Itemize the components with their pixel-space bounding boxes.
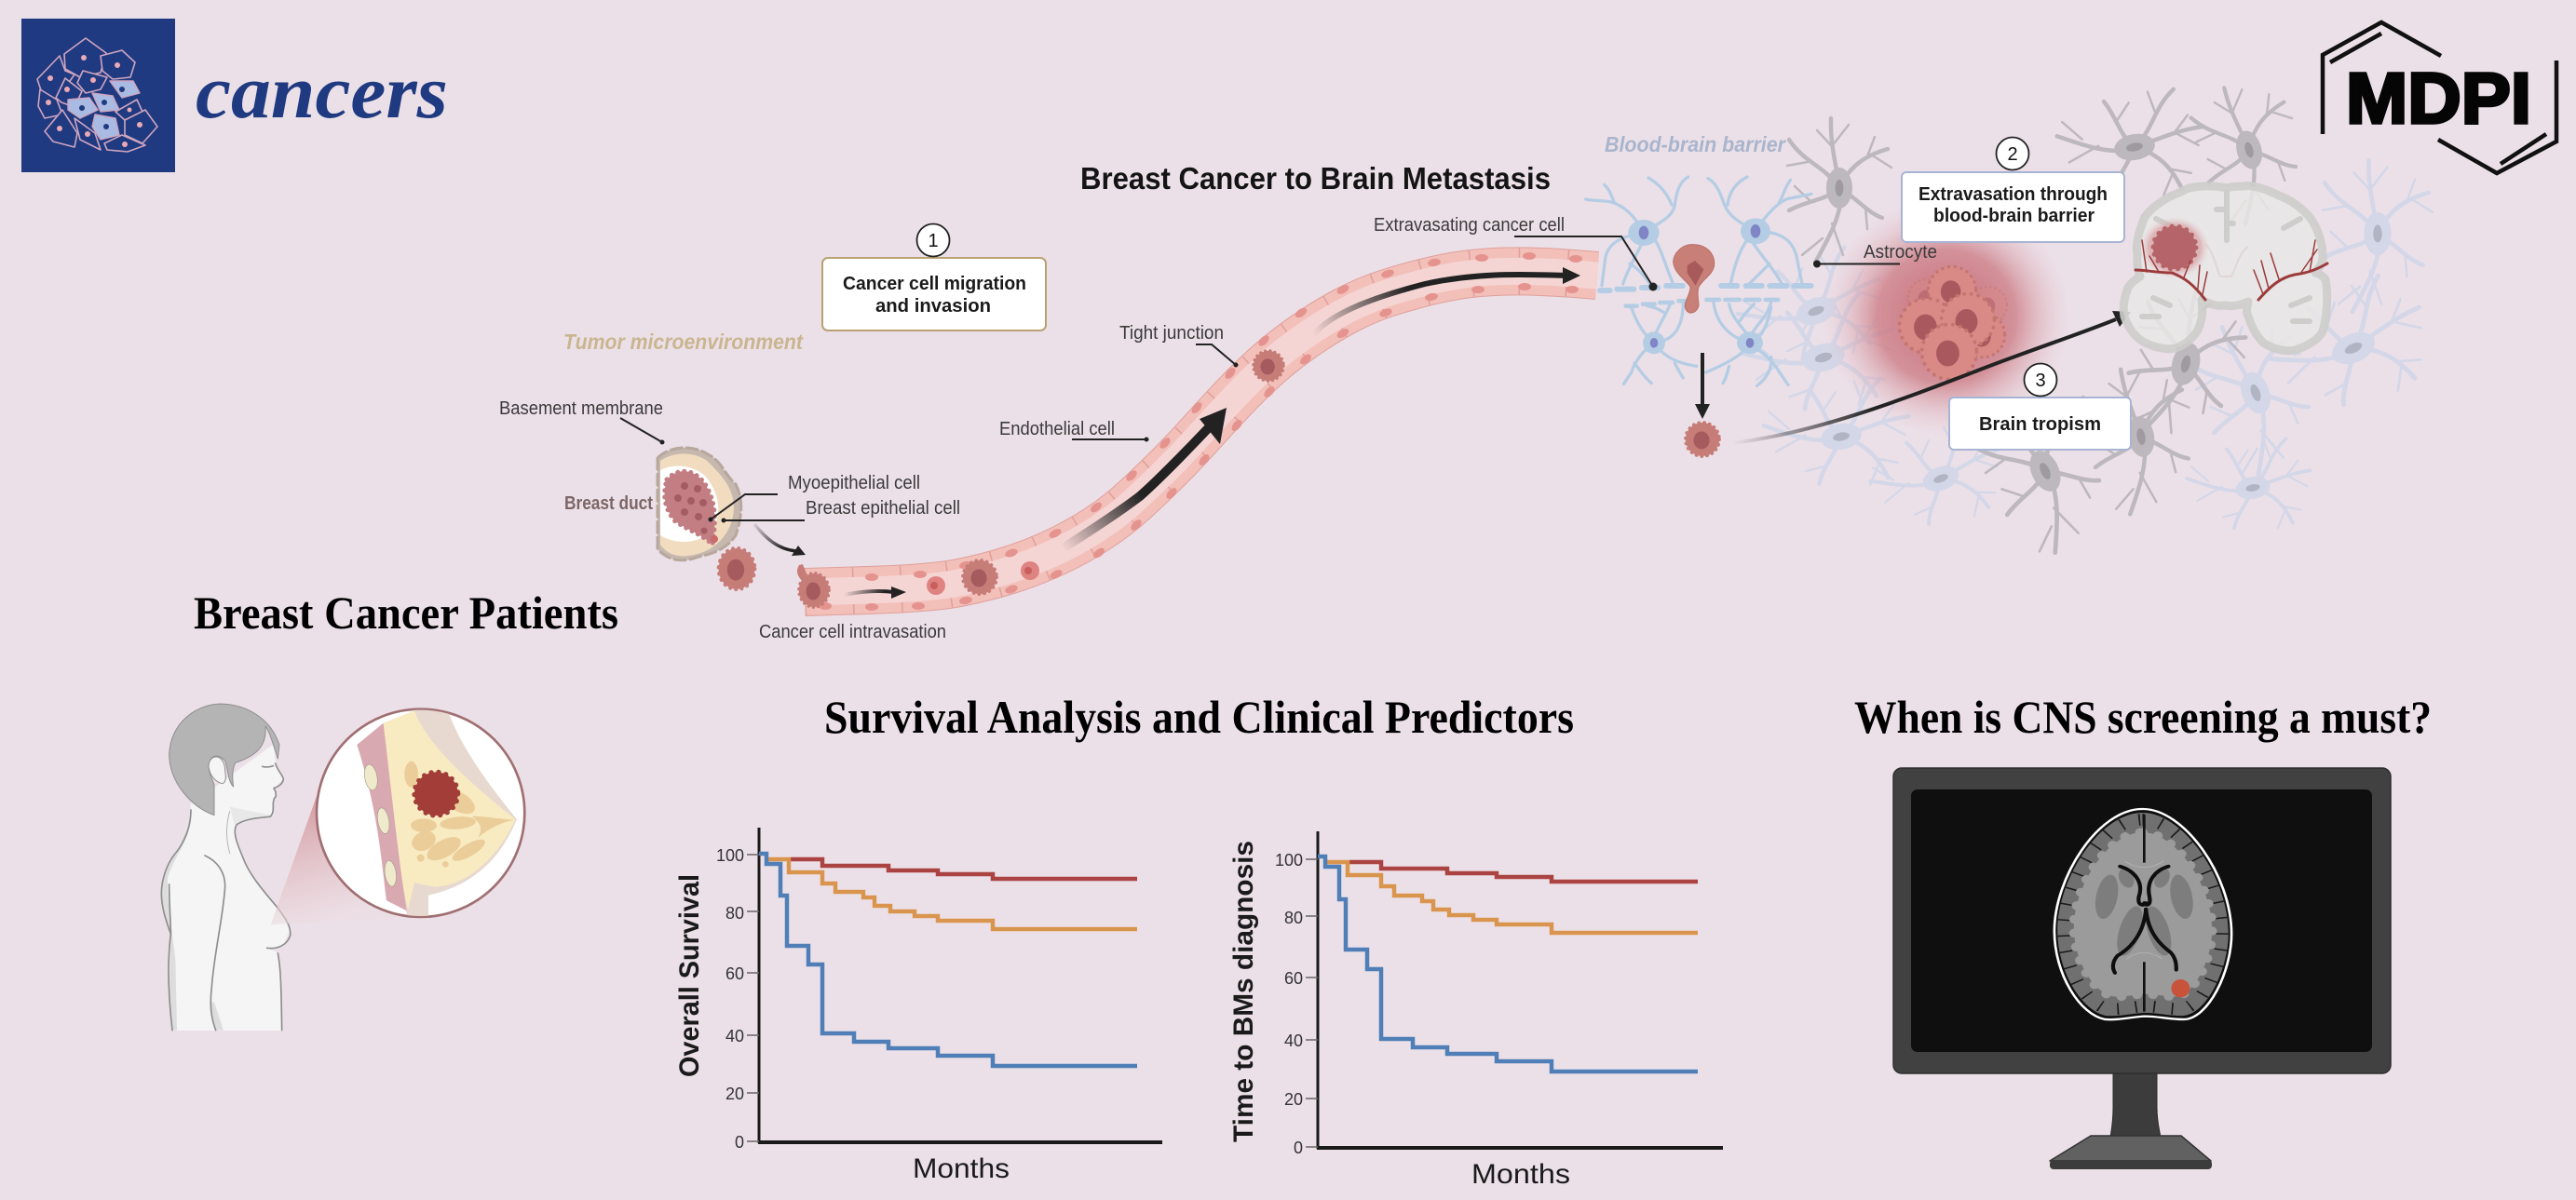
heading: breast cancer patients: Breast Cancer Patients	[194, 587, 618, 639]
zoom wedge	[271, 794, 416, 924]
y axis tick labels	[1275, 851, 1303, 1157]
logo: cancers journal	[21, 19, 448, 172]
step 2 box	[1902, 172, 2124, 242]
line: orange time curve	[1326, 862, 1698, 933]
axes	[747, 828, 1162, 1143]
hair	[169, 704, 279, 816]
icon: cancers cell cluster	[21, 19, 175, 172]
y axis tick labels: 40	[1284, 1031, 1303, 1050]
blood-brain barrier astrocytes	[1586, 177, 1814, 385]
label: breast epithelial cell: Breast epithelial cell	[806, 498, 960, 519]
monitor stand	[2050, 1071, 2212, 1169]
axes	[1306, 831, 1723, 1149]
y axis tick labels: 0	[1294, 1139, 1303, 1157]
arrow: small vessel arrow	[844, 587, 906, 599]
step 2 text: Extravasation through	[1918, 184, 2108, 205]
step 3 box	[1949, 398, 2131, 450]
brain scan lesion	[2171, 979, 2190, 997]
label: myoepithelial cell: Myoepithelial cell	[788, 473, 920, 493]
faded astrocyte background	[1729, 73, 2447, 565]
label: basement membrane: Basement membrane	[499, 398, 663, 419]
label: myoepithelial cell	[708, 473, 920, 521]
y axis tick labels: 40	[725, 1027, 744, 1045]
arrow: toward brain	[1732, 311, 2131, 443]
y axis tick labels	[716, 846, 744, 1152]
arrow: duct to vessel	[754, 524, 806, 556]
line: orange survival curve	[767, 859, 1137, 929]
icon: MDPI hexagon	[2323, 22, 2556, 173]
heading: survival analysis and clinical predictors: Survival Analysis and Clinical Predictors	[824, 691, 1574, 743]
step 1 box	[822, 258, 1046, 330]
tumor microenvironment label: Tumor microenvironment	[563, 330, 804, 354]
line: red time curve	[1349, 862, 1698, 882]
step 2: extravasation through blood-brain barrier	[1902, 138, 2124, 242]
MDPI wordmark: MDPI	[2346, 59, 2531, 139]
axial brain scan	[2054, 809, 2231, 1019]
step 1 number	[916, 223, 950, 257]
label: tight junction	[1119, 323, 1239, 367]
y axis tick labels: 100	[716, 846, 744, 865]
heading: breast cancer to brain metastasis: Breast Cancer to Brain Metastasis	[1080, 161, 1551, 196]
step 1 text	[843, 274, 1026, 317]
logo: MDPI	[2323, 22, 2556, 173]
label: blood-brain barrier: Blood-brain barrier	[1605, 132, 1786, 156]
step 1 number: 1	[928, 231, 939, 251]
step 2 number: 2	[2007, 144, 2018, 165]
coronal brain with tumor	[2123, 186, 2327, 351]
y axis tick labels: 60	[1284, 969, 1303, 988]
step 2 text: blood-brain barrier	[1933, 206, 2095, 226]
label: cancer cell intravasation: Cancer cell intravasation	[759, 622, 946, 642]
label: astrocyte	[1813, 242, 1937, 268]
arrow: extravasated cell downward	[1695, 353, 1710, 419]
y axis title: Time to BMs diagnosis	[1228, 841, 1259, 1142]
x axis title: Months	[1471, 1159, 1570, 1190]
step 2 number	[1997, 138, 2028, 169]
extravasated cancer cell	[1686, 423, 1719, 456]
step 3 number	[2025, 363, 2056, 397]
arrow: upper vessel arrow	[1313, 267, 1580, 335]
breast duct	[658, 448, 741, 560]
label: basement membrane	[499, 398, 665, 445]
breast cross-section	[317, 708, 524, 919]
step 3 text: Brain tropism	[1979, 414, 2101, 435]
chart: overall survival	[674, 828, 1162, 1184]
blood vessel	[805, 252, 1597, 611]
extravasating cancer cell	[1674, 245, 1715, 313]
step 1 text: and invasion	[875, 296, 991, 317]
label: tight junction: Tight junction	[1119, 323, 1224, 344]
monitor with brain scan	[1893, 768, 2391, 1169]
chart: time to BMs diagnosis	[1228, 831, 1723, 1190]
step 1: cancer cell migration and invasion	[822, 223, 1046, 330]
line: blue time curve	[1318, 856, 1698, 1072]
label: extravasating cancer cell: Extravasating cancer cell	[1374, 215, 1565, 236]
line: red survival curve	[791, 859, 1137, 879]
monitor screen	[1911, 789, 2372, 1052]
y axis tick labels: 60	[725, 964, 744, 983]
label: extravasating cancer cell	[1374, 215, 1658, 290]
ear	[209, 757, 225, 784]
tumor glow and cluster	[1821, 196, 2072, 438]
illustration: patient with breast cross-section	[161, 704, 524, 1031]
label: endothelial cell: Endothelial cell	[999, 419, 1115, 439]
step 3: brain tropism	[1949, 363, 2131, 450]
step 3 number: 3	[2035, 371, 2046, 391]
label: breast duct: Breast duct	[564, 493, 653, 514]
x axis title: Months	[913, 1153, 1010, 1184]
step 2 text	[1918, 184, 2108, 226]
label: breast epithelial cell	[721, 498, 960, 523]
y axis tick labels: 20	[725, 1085, 744, 1103]
label: astrocyte: Astrocyte	[1864, 242, 1937, 263]
step 1 text: Cancer cell migration	[843, 274, 1026, 294]
line: blue survival curve	[759, 854, 1137, 1066]
y axis tick labels: 80	[725, 904, 744, 923]
cancer cells inside vessel	[797, 351, 1283, 607]
arrow: large vessel arrow	[1063, 408, 1227, 548]
y axis tick labels: 100	[1275, 851, 1303, 870]
logo wordmark: cancers	[196, 49, 448, 134]
heading: when is CNS screening a must: When is CNS screening a must?	[1854, 691, 2432, 743]
woman silhouette	[161, 745, 291, 1031]
migrating cancer cell	[719, 548, 754, 589]
monitor frame	[1893, 768, 2391, 1073]
y axis tick labels: 0	[735, 1133, 744, 1152]
y axis title: Overall Survival	[674, 874, 705, 1077]
y axis tick labels: 80	[1284, 909, 1303, 927]
y axis tick labels: 20	[1284, 1090, 1303, 1109]
